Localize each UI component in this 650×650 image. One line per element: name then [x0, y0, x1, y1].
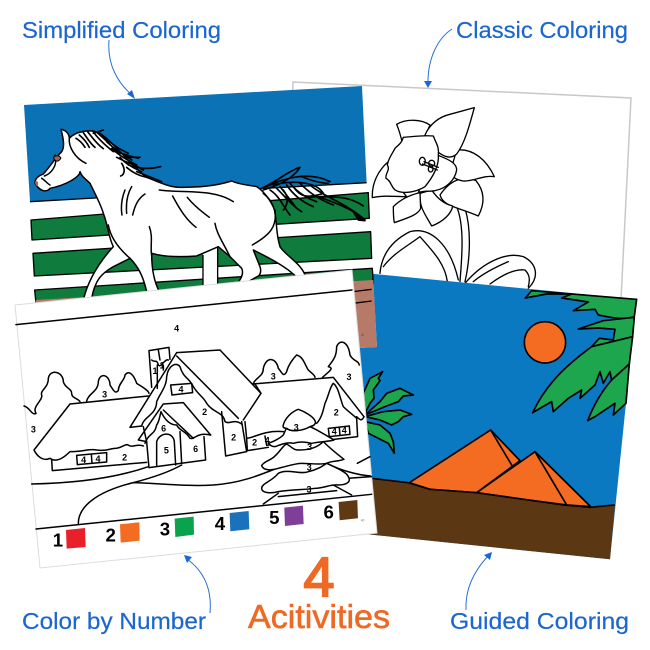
region numbers: 3 — [346, 372, 351, 382]
region numbers: 1 — [159, 361, 164, 371]
ground strip — [36, 280, 377, 366]
label: color by number: Color by Number — [22, 608, 206, 634]
region numbers: 6 — [193, 444, 198, 454]
daffodil line drawing — [372, 108, 535, 288]
region numbers: 1 — [152, 366, 157, 376]
sun — [524, 322, 566, 363]
color legend: 2 — [105, 524, 116, 545]
region numbers: 2 — [252, 437, 257, 447]
region numbers: 2 — [334, 408, 339, 418]
region numbers: 3 — [306, 484, 311, 494]
green fence rails — [31, 193, 373, 303]
big number 4: 4 — [303, 545, 335, 608]
winter house drawing — [16, 290, 372, 529]
large palm fronds — [525, 291, 637, 421]
color legend: 6 — [323, 501, 334, 522]
pyramids — [409, 430, 591, 507]
region numbers: 4 — [95, 454, 100, 464]
mane — [76, 130, 162, 182]
color legend: 4 — [215, 513, 226, 534]
region numbers: 4 — [332, 427, 337, 437]
horse — [35, 129, 306, 300]
region numbers: 3 — [31, 424, 36, 434]
color legend: 1 — [53, 530, 63, 551]
region numbers: 3 — [271, 371, 276, 381]
region numbers: 2 — [122, 453, 127, 463]
region numbers: 3 — [307, 463, 312, 473]
sky — [24, 86, 367, 202]
page background — [24, 86, 377, 366]
heading: acitivities: Acitivities — [248, 598, 390, 635]
ground lines and dot — [353, 289, 372, 336]
region numbers: 2 — [231, 433, 236, 443]
panel: color by number page — [15, 270, 377, 568]
region numbers: 4 — [178, 384, 183, 394]
region numbers: 3 — [307, 442, 312, 452]
label: classic coloring: Classic Coloring — [456, 17, 628, 43]
region numbers: 6 — [161, 423, 166, 433]
fence post — [203, 233, 218, 290]
panel: classic coloring page — [285, 82, 631, 300]
panel: guided coloring page — [317, 271, 637, 559]
sky — [317, 271, 637, 559]
arrow: classic coloring — [424, 29, 452, 88]
arrow: simplified coloring — [109, 40, 135, 99]
arrow: guided coloring — [466, 552, 492, 610]
label: guided coloring: Guided Coloring — [450, 608, 629, 634]
ground — [317, 473, 615, 559]
color legend: 3 — [160, 518, 170, 539]
region numbers: 4 — [174, 324, 179, 334]
color legend: 5 — [269, 507, 280, 528]
region numbers: 5 — [164, 446, 169, 456]
region numbers — [31, 324, 351, 494]
region numbers: 3 — [102, 390, 107, 400]
color legend — [53, 500, 365, 551]
small palm — [363, 372, 413, 453]
region numbers: 3 — [294, 423, 299, 433]
region numbers: 2 — [202, 407, 207, 417]
panel: simplified coloring page — [24, 86, 377, 366]
region numbers: 4 — [265, 436, 270, 446]
label: simplified coloring: Simplified Coloring — [22, 17, 221, 43]
tail — [262, 167, 365, 221]
region numbers: 4 — [81, 455, 86, 465]
color legend: 40 — [361, 519, 365, 523]
arrow: color by number — [184, 555, 210, 613]
fir tree — [262, 409, 349, 493]
region numbers: 4 — [342, 426, 347, 436]
